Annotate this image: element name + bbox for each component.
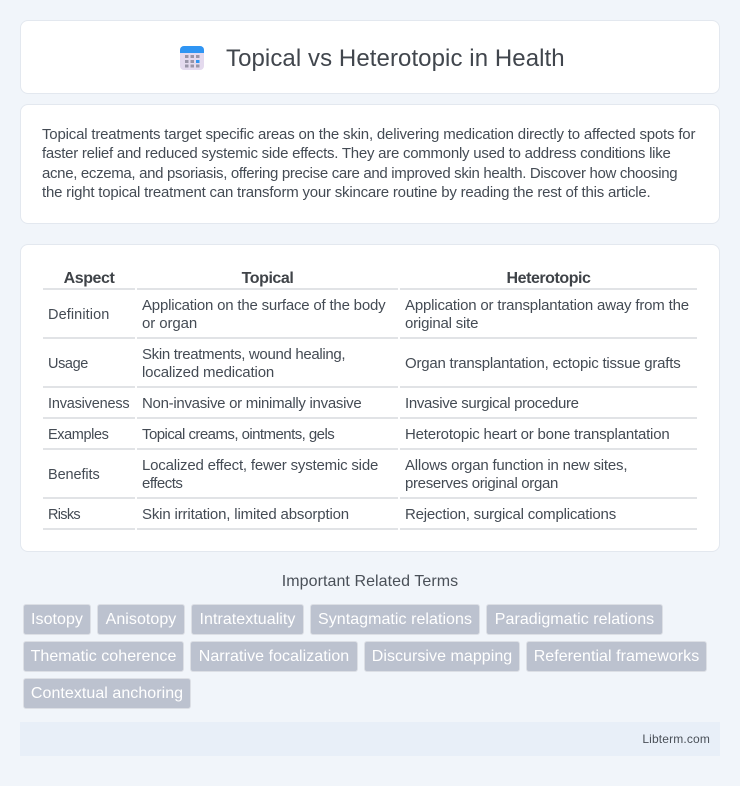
related terms tags: Discursive mapping [372,648,512,665]
row: examples: Examples [48,427,108,443]
row: usage [48,346,680,381]
row: benefits: Localized effect, fewer systemic side [142,457,378,474]
row: benefits: Benefits [48,467,100,483]
row: risks: Rejection, surgical complications [405,506,616,523]
title: Topical vs Heterotopic in Health [226,45,565,72]
table panel [20,244,720,552]
intro text: acne, eczema, and psoriasis, offering precise care and improved skin health. Discover how choosing [42,165,677,182]
footer bar [20,722,720,756]
related terms tags [23,604,707,709]
icon: calendar [180,46,204,70]
row: invasiveness: Invasiveness [48,396,129,412]
row: invasiveness: Non-invasive or minimally invasive [142,395,361,412]
row: risks [48,506,616,523]
row: definition: Application or transplantation away from the [405,297,689,314]
comparison table [43,270,697,530]
row: definition: original site [405,315,478,332]
related terms tags: Contextual anchoring [31,685,183,702]
related terms tags: Paradigmatic relations [495,611,654,628]
related terms tags: Intratextuality [200,611,295,628]
intro panel [20,104,720,224]
row: invasiveness [48,395,579,412]
related terms tags: Syntagmatic relations [318,611,472,628]
row: definition [48,297,689,332]
row: definition: Application on the surface of the body [142,297,385,314]
header row: Heterotopic [507,270,590,287]
intro text: the right topical treatment can transform your skincare routine by reading the rest of this article. [42,184,650,201]
title card [20,20,720,94]
intro text [42,126,696,201]
intro text: faster relief and reduced systemic side effects. They are commonly used to address conditions like [42,145,671,162]
row: risks: Risks [48,507,80,523]
row: usage: localized medication [142,364,274,381]
row: benefits: preserves original organ [405,475,558,492]
intro text: Topical treatments target specific areas on the skin, delivering medication directly to affected spots for [42,126,695,143]
row: usage: Usage [48,356,88,372]
row: examples: Topical creams, ointments, gels [142,426,334,443]
row: benefits [48,457,627,492]
row: usage: Skin treatments, wound healing, [142,346,345,363]
related terms tags: Isotopy [31,611,83,628]
row: benefits: effects [142,475,182,492]
header row [64,270,590,287]
row: examples: Heterotopic heart or bone transplantation [405,426,669,443]
row: benefits: Allows organ function in new sites, [405,457,627,474]
row: usage: Organ transplantation, ectopic tissue grafts [405,355,680,372]
related terms tags: Thematic coherence [31,648,176,665]
related terms tags: Anisotopy [106,611,176,628]
header row: Topical [242,270,293,287]
row: examples [48,426,669,443]
row: risks: Skin irritation, limited absorption [142,506,349,523]
header row: Aspect [64,270,114,287]
related terms tags: Referential frameworks [534,648,699,665]
related terms heading: Important Related Terms [282,573,458,590]
related terms tags: Narrative focalization [199,648,349,665]
row: invasiveness: Invasive surgical procedure [405,395,579,412]
footer credit: Libterm.com [642,732,710,746]
row: definition: Definition [48,307,109,323]
row: definition: or organ [142,315,197,332]
